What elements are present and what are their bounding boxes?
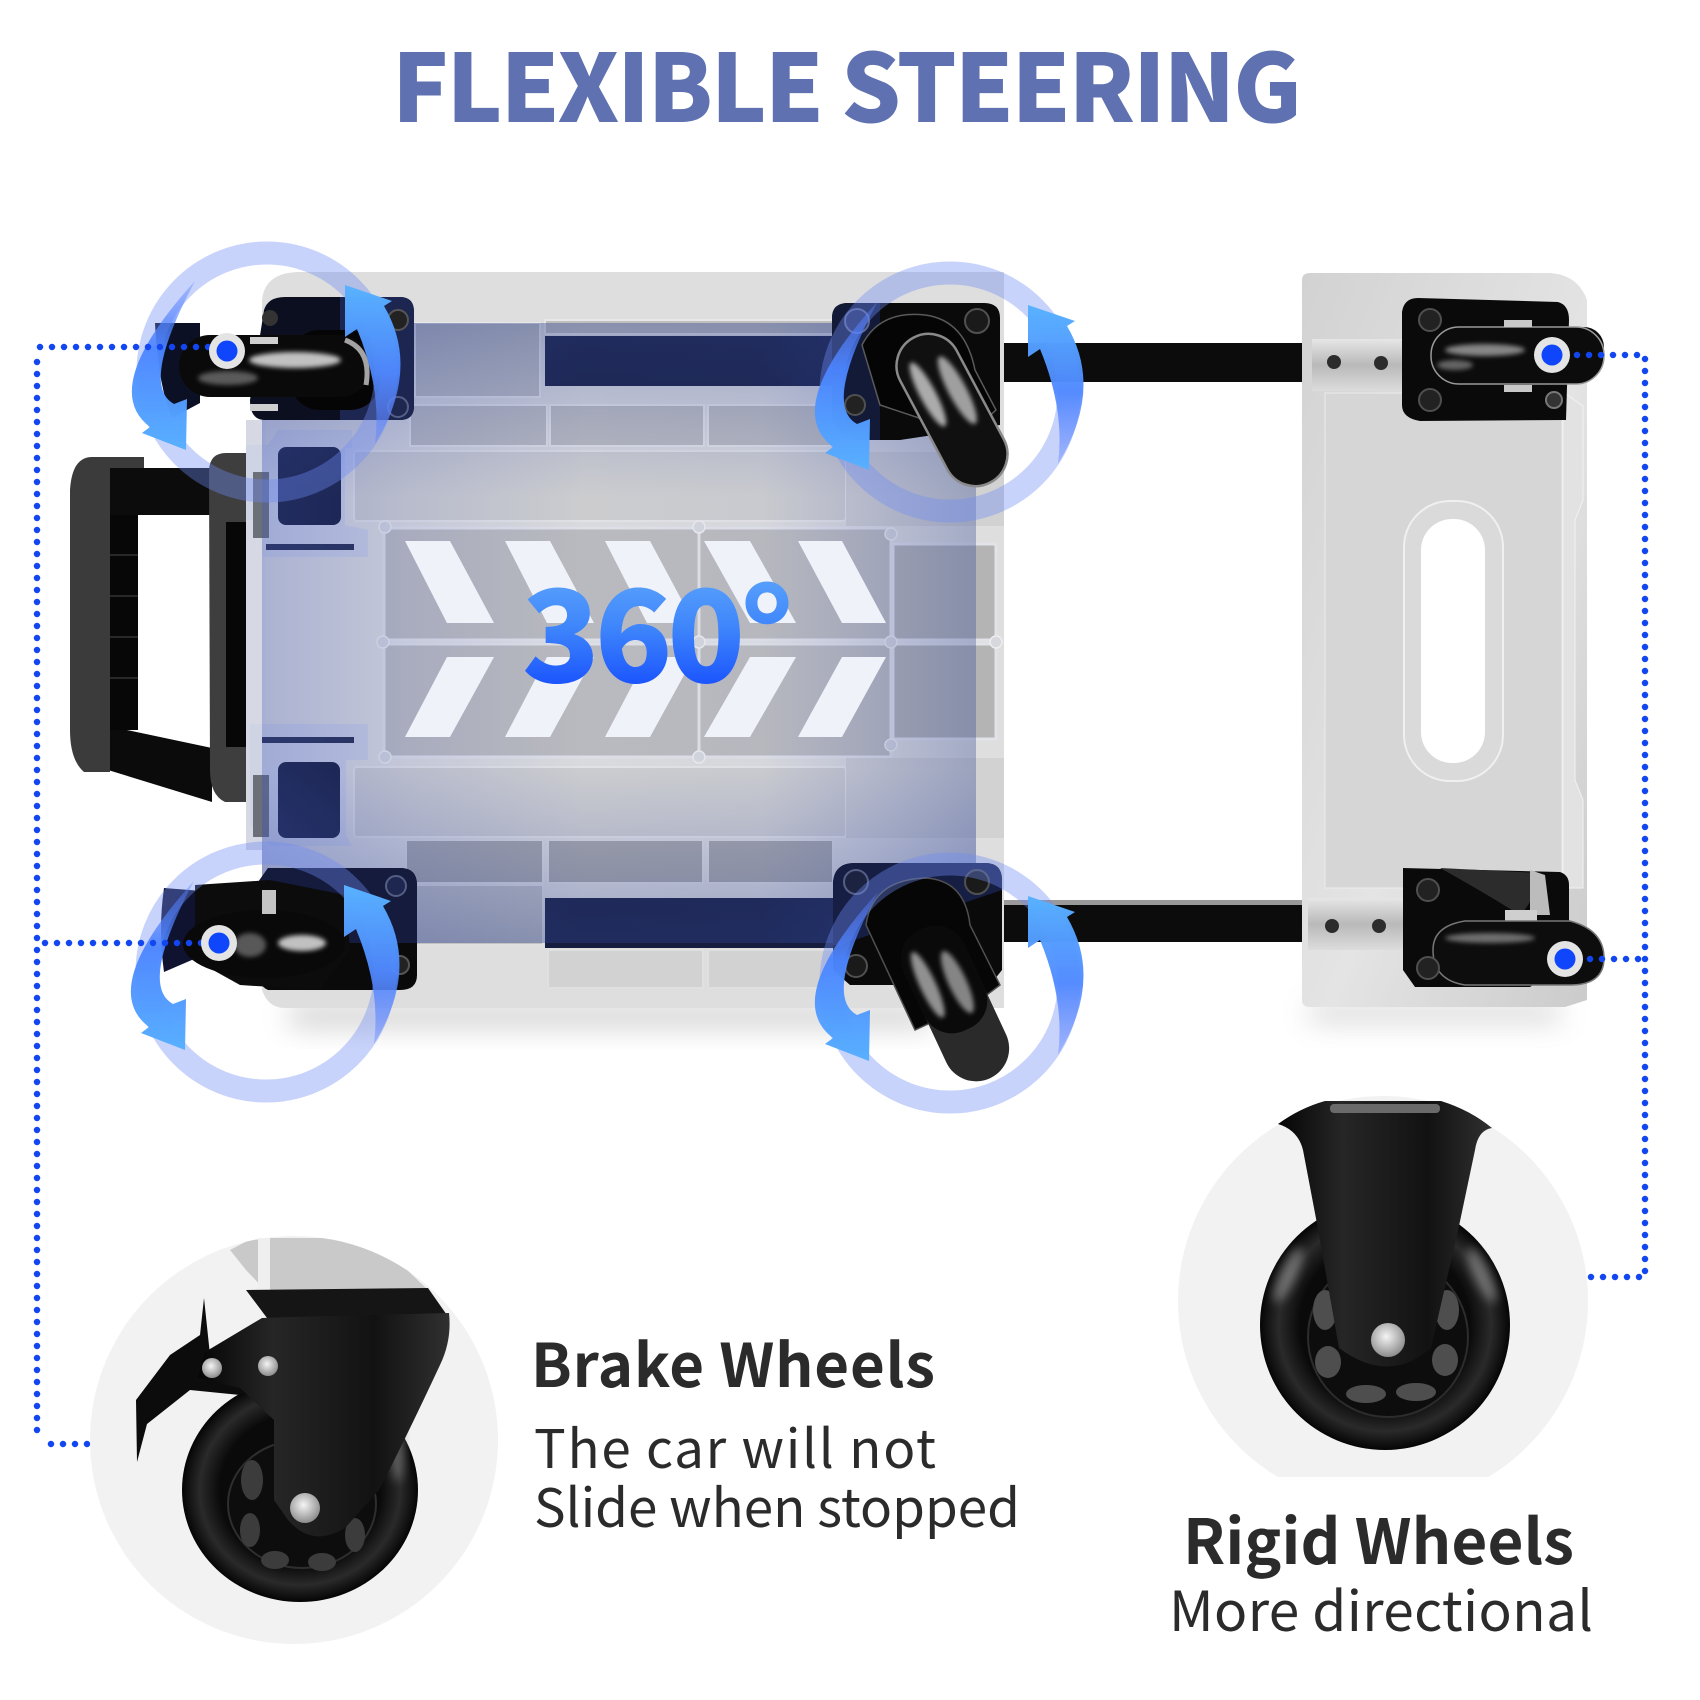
upper ribbed section [410, 320, 840, 446]
caster: rear top [1402, 298, 1604, 421]
rigid wheels description: More directional [1169, 1567, 1593, 1647]
brake wheels description: The car will not [534, 1408, 936, 1484]
lower ribbed section [406, 840, 833, 988]
fork [198, 1313, 450, 1536]
lower long bar [354, 767, 846, 837]
centre frame [384, 528, 996, 757]
arrow: right [345, 285, 400, 444]
fork [1278, 1101, 1492, 1366]
marker dot: top-left wheel [209, 333, 245, 369]
connector blocks [246, 420, 368, 850]
caster: front top-right [832, 303, 1019, 497]
rotation ring: top-right [831, 273, 1083, 511]
arrow: left, bottom-right ring [815, 892, 878, 1061]
marker dot: bottom-left wheel [201, 925, 237, 961]
background circle [90, 1236, 498, 1644]
brake wheel detail [90, 1236, 498, 1644]
upper dark slot [545, 336, 840, 386]
blue tint overlay [262, 323, 976, 943]
360 degree label: 360° [522, 534, 794, 719]
caster: rear bottom [1403, 868, 1604, 987]
rotation ring: top-left [148, 253, 400, 491]
cart shadow [290, 1005, 1560, 1027]
metal deck corner [230, 1238, 428, 1292]
marker dot: rear top wheel [1534, 337, 1570, 373]
upper long bar [354, 451, 846, 521]
long connecting tubes [990, 343, 1312, 942]
arrow: right [344, 885, 399, 1044]
axle [1371, 1323, 1405, 1357]
brake wheels heading: Brake Wheels [531, 1318, 935, 1405]
arrow: left, top-right ring [815, 301, 878, 470]
folding handle [70, 453, 250, 802]
caster: front bottom-right [833, 863, 1020, 1092]
rivets and axle [202, 1356, 320, 1523]
dotted leader lines [37, 347, 1645, 1444]
caster: front bottom-left [161, 868, 417, 990]
lower dark slot [545, 898, 833, 948]
arrow: right [1028, 896, 1083, 1055]
rigid wheel detail [1178, 1096, 1588, 1506]
brake wheels description: Slide when stopped [534, 1467, 1020, 1543]
title: FLEXIBLE STEERING [392, 14, 1302, 150]
frame junction nodes [377, 521, 1002, 763]
brake lever [136, 1298, 262, 1462]
rotation ring: bottom-right [831, 864, 1083, 1102]
arrow: left, top-left ring [132, 281, 195, 450]
wheel [182, 1378, 418, 1602]
caster: front top-left [155, 297, 414, 420]
rotation ring: bottom-left [147, 853, 399, 1091]
brake wheels description [534, 1408, 1020, 1543]
chevrons [405, 541, 886, 737]
arrow: left, bottom-left ring [131, 881, 194, 1050]
marker dot: rear bottom wheel [1547, 941, 1583, 977]
background circle [1178, 1096, 1588, 1506]
rigid wheels heading: Rigid Wheels [1183, 1492, 1574, 1582]
rear panel [1302, 273, 1587, 1007]
wheel [1260, 1200, 1510, 1450]
arrow: right [1028, 305, 1083, 464]
slot [1404, 501, 1503, 781]
main deck panel [262, 272, 1004, 1008]
rear brackets [1312, 339, 1404, 391]
